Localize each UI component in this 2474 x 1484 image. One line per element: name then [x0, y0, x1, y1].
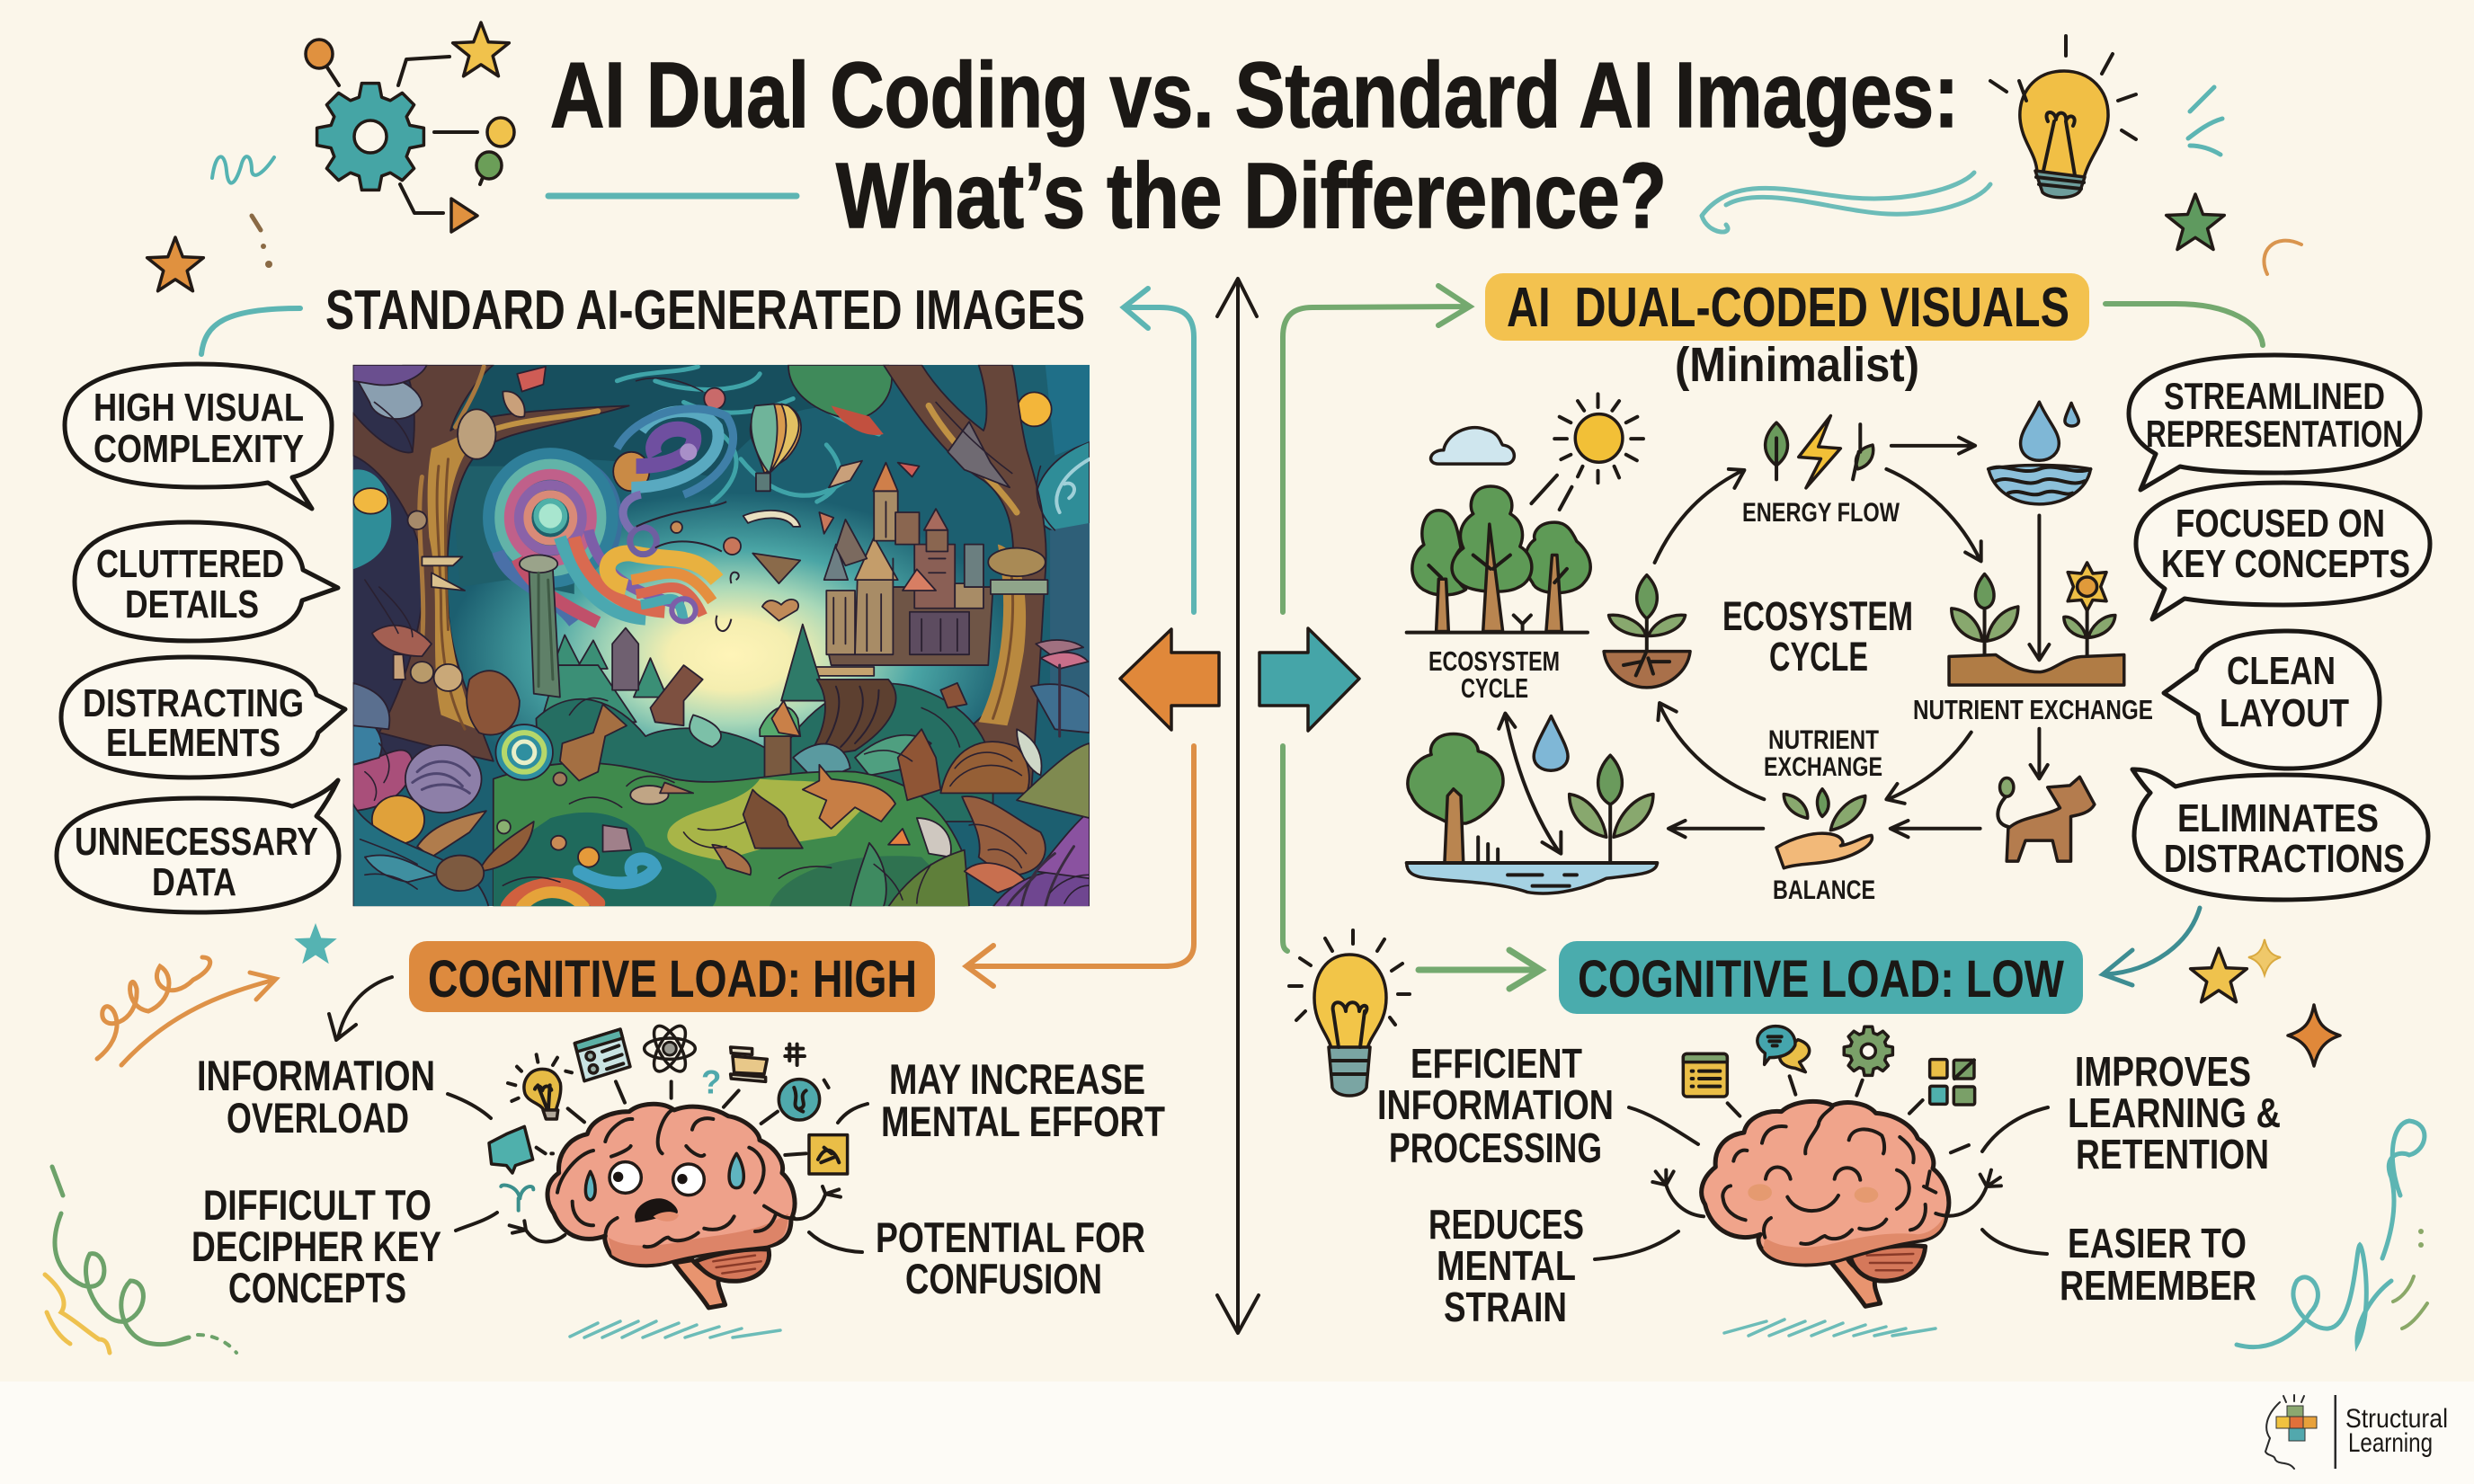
text: difficult to decipher: [191, 1181, 441, 1311]
labels: NUTRIENT: [1768, 725, 1879, 755]
bubble: focused on key concepts: FOCUSED ON: [2176, 502, 2385, 546]
labels: CYCLE: [1461, 672, 1528, 704]
sub: arms: [510, 1186, 841, 1242]
wordmark: [2345, 1404, 2448, 1458]
icons and arrows: [1407, 394, 2124, 893]
text: potential for confusion: CONFUSION: [905, 1255, 1102, 1302]
connector: teal arrow to heading: [1124, 289, 1194, 612]
icon: teal squiggle: [212, 156, 274, 183]
sub: foreground left: [353, 683, 553, 907]
title: AI Dual Coding vs. Standard AI Images:: [550, 43, 1959, 147]
decorative hatch under happy brain: [1724, 1320, 1936, 1336]
footer strip: [0, 1382, 2474, 1484]
bubble: cluttered details: [75, 522, 338, 641]
bubble: distracting elements: DISTRACTING: [83, 681, 304, 725]
bubble: eliminates distractions: [2132, 769, 2428, 900]
divider: [2334, 1395, 2336, 1469]
bubble: cluttered details: CLUTTERED: [96, 542, 284, 586]
heading: AI dual-coded visuals: AI DUAL-CODED VISUALS: [1507, 277, 2069, 339]
bubble: eliminates distractions: ELIMINATES: [2177, 796, 2379, 840]
icon: light bulb top right: [1990, 36, 2136, 198]
labels: EXCHANGE: [1764, 752, 1882, 782]
connector: teal top left: [201, 308, 300, 354]
labels: ECOSYSTEM: [1428, 645, 1560, 677]
text: reduces mental strain: MENTAL: [1437, 1242, 1576, 1289]
sub: left and right trees: [353, 365, 629, 761]
sub: surrounding icons: ?: [701, 1064, 721, 1101]
sub: stem and cerebellum: [1828, 1246, 1926, 1306]
bubble: unnecessary data: [57, 780, 339, 912]
text: efficient processing: [1377, 1040, 1614, 1171]
connector: orange arrow to load: [966, 746, 1194, 986]
sub: hand and leaves: [1776, 789, 1872, 868]
sub: cloud and sun: [1431, 394, 1643, 510]
labels: BALANCE: [1773, 875, 1875, 905]
illustration: busy fantasy forest: [353, 365, 1090, 907]
wordmark: Structural: [2345, 1404, 2448, 1434]
sub: arms: [1652, 1170, 2001, 1216]
bubble: clean layout: [2164, 631, 2380, 769]
sub: smiling face: [1748, 1168, 1878, 1211]
text: potential for confusion: [876, 1213, 1145, 1302]
text: information overload: INFORMATION: [197, 1052, 435, 1099]
text: information overload: [197, 1052, 435, 1142]
decorative orange squiggle arrow: [97, 957, 276, 1065]
bubble: high visual complexity: [65, 364, 332, 509]
sub: animals: [411, 662, 1046, 875]
sub: surrounding icons: [1683, 1026, 1975, 1152]
icon: stars: [2191, 939, 2340, 1066]
sub: pine trees: [541, 625, 826, 722]
teal underline left of subtitle: [548, 192, 796, 200]
icon: green star: [2167, 194, 2224, 250]
panel: high load points: [191, 1052, 1165, 1311]
heading: standard images: STANDARD AI-GENERATED IMAGES: [325, 280, 1085, 342]
title: [550, 43, 1959, 247]
sub: water: [1989, 402, 2090, 504]
text: mental effort: [881, 1055, 1165, 1145]
connector: green curve right: [2105, 304, 2263, 345]
badge: cognitive load low: COGNITIVE LOAD: LOW: [1578, 950, 2064, 1009]
sub: cycle arrows: [1499, 438, 2049, 854]
text: improves learning: [2068, 1048, 2281, 1177]
badge: cognitive load high: COGNITIVE LOAD: HIGH: [428, 950, 917, 1009]
text: mental effort: MENTAL EFFORT: [881, 1097, 1165, 1145]
icon: head with blocks: [2265, 1395, 2317, 1469]
labels: [1428, 498, 2153, 905]
icon: orange star: [147, 237, 203, 291]
text: improves learning: IMPROVES: [2075, 1048, 2251, 1095]
text: reduces mental strain: REDUCES: [1428, 1201, 1584, 1248]
bubble: focused on key concepts: [2136, 483, 2430, 619]
bubble: focused on key concepts: KEY CONCEPTS: [2161, 542, 2410, 586]
bubble: clean layout: CLEAN: [2227, 649, 2336, 693]
arrow: green to low load: [1419, 950, 1541, 989]
illustration: happy brain: [1652, 1026, 2001, 1306]
text: potential for confusion: POTENTIAL FOR: [876, 1213, 1145, 1261]
sub: ink texture: [360, 378, 1088, 903]
connector: dark teal arrow: [2103, 908, 2200, 985]
text: improves learning: LEARNING &: [2068, 1089, 2281, 1136]
labels: ECOSYSTEM: [1722, 593, 1913, 639]
connector strokes: [448, 1094, 868, 1252]
sub: foreground right: [850, 640, 1090, 907]
badge: cognitive load low: [1559, 941, 2083, 1014]
bubble: streamlined representation: [2129, 355, 2420, 490]
decorative teal dashes: [2188, 87, 2222, 155]
badge: cognitive load high: [409, 941, 935, 1012]
bubble: high visual complexity: HIGH VISUAL: [93, 386, 304, 430]
title: What’s the Difference?: [836, 144, 1667, 247]
bubble: distracting elements: [61, 657, 345, 778]
decorative orange arc: [2264, 241, 2301, 274]
bubble: eliminates distractions: DISTRACTIONS: [2164, 837, 2405, 881]
bubble: cluttered details: DETAILS: [125, 582, 259, 626]
panel: right speech bubbles: [2129, 355, 2430, 900]
text: difficult to decipher: CONCEPTS: [228, 1264, 406, 1311]
sub: soil and plants: [1949, 563, 2124, 685]
text: reduces mental strain: [1428, 1201, 1584, 1330]
decorative green scribble: [45, 1167, 236, 1353]
text: efficient processing: PROCESSING: [1389, 1124, 1602, 1171]
text: reduces mental strain: STRAIN: [1444, 1284, 1567, 1330]
arrow: high load to overload: [329, 977, 392, 1040]
decorative teal wave: [1702, 173, 1990, 232]
icon: teal right arrow: [1259, 628, 1359, 731]
panel: low load points: [1377, 1040, 2281, 1330]
decorative hatch under stressed brain: [570, 1321, 780, 1337]
sub: castle: [812, 463, 993, 676]
text: information overload: OVERLOAD: [227, 1094, 409, 1142]
bubble: unnecessary data: DATA: [152, 860, 236, 904]
connector: green arrow to heading: [1283, 286, 1470, 612]
decorative dots: [252, 216, 272, 268]
sub: lower tree and pond: [1407, 716, 1657, 893]
icon: teal star sparkle: [294, 923, 337, 964]
sub: stem and cerebellum: [674, 1249, 770, 1308]
sub: balloons and planets: [353, 365, 920, 621]
bubble: unnecessary data: UNNECESSARY: [75, 820, 318, 864]
text: easier to remember: EASIER TO: [2068, 1220, 2247, 1266]
sub: rainbow swirl: [490, 409, 739, 631]
text: efficient processing: EFFICIENT: [1411, 1040, 1582, 1087]
connector: green line down: [1283, 746, 1287, 951]
labels: ENERGY FLOW: [1742, 498, 1900, 528]
text: difficult to decipher: DECIPHER KEY: [191, 1222, 441, 1270]
sub: surrounding icons: [489, 1021, 848, 1211]
labels: CYCLE: [1769, 634, 1868, 680]
sub: worried face: [585, 1146, 743, 1222]
sub: midground hills: [536, 683, 993, 822]
panel: left speech bubbles: [57, 364, 345, 912]
text: efficient processing: INFORMATION: [1377, 1081, 1614, 1128]
icon: bulb by low load: [1289, 930, 1410, 1096]
text: easier to remember: [2060, 1220, 2256, 1309]
text: easier to remember: REMEMBER: [2060, 1262, 2256, 1309]
text: improves learning: RETENTION: [2076, 1131, 2269, 1177]
wordmark: Learning: [2348, 1428, 2433, 1458]
central double arrow: [1217, 279, 1259, 1333]
logo: Structural Learning: [2265, 1395, 2448, 1469]
icon: orange left arrow: [1120, 629, 1219, 730]
sub: forest: [1407, 486, 1590, 633]
sub: energy icons: [1766, 416, 1873, 488]
connector strokes: [1595, 1107, 2048, 1259]
icon: gear network: [306, 22, 514, 232]
subheading: minimalist: (Minimalist): [1675, 338, 1919, 392]
decorative teal scribble: [2237, 1121, 2427, 1347]
sub: animal: [1998, 777, 2095, 861]
illustration: stressed brain: [489, 1021, 848, 1308]
text: mental effort: MAY INCREASE: [889, 1055, 1145, 1103]
bubble: clean layout: LAYOUT: [2220, 691, 2349, 735]
bubble: high visual complexity: COMPLEXITY: [93, 427, 304, 471]
text: difficult to decipher: DIFFICULT TO: [203, 1181, 432, 1229]
bubble: distracting elements: ELEMENTS: [106, 721, 280, 765]
sub: brain body: [547, 1104, 795, 1266]
sub: brain body: [1702, 1101, 1949, 1265]
sub: seedling: [1604, 575, 1690, 688]
sub: meadow: [494, 763, 965, 907]
labels: NUTRIENT EXCHANGE: [1913, 694, 2153, 725]
bubble: streamlined representation: STREAMLINED: [2164, 375, 2385, 417]
diagram: ecosystem cycle: [1407, 394, 2153, 905]
